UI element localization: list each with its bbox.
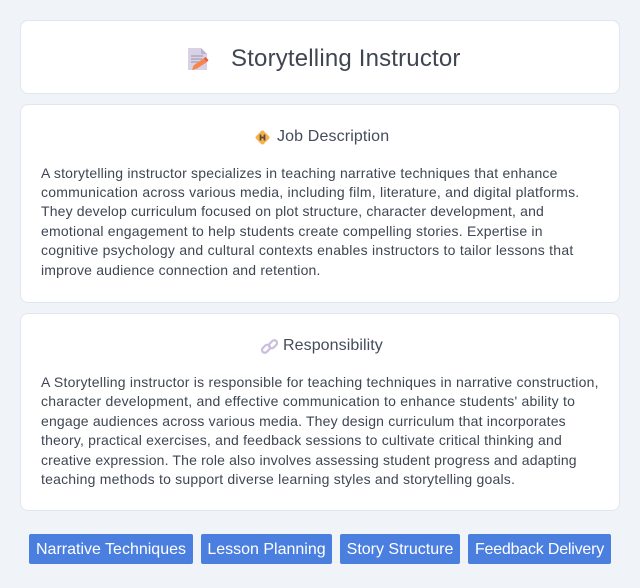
text block: responsibility: A Storytelling instructor is responsible for teaching techniques in narrative construction,: [41, 374, 599, 390]
text block: job description: [41, 165, 579, 278]
text block: job description: improve audience connection and retention.: [41, 262, 321, 278]
text block: responsibility: character development, and effective communication to enhance students' ability to: [41, 393, 575, 409]
text block: job description: cognitive psychology and cultural contexts enables instructors to tailor lessons that: [41, 242, 574, 258]
icon: chain link: [261, 339, 278, 354]
text block: job description: communication across various media, including film, literature, and digital platforms.: [41, 184, 579, 200]
panel: title card: [20, 20, 620, 94]
tag: Narrative Techniques: [29, 534, 193, 564]
tag: Lesson Planning: Lesson Planning: [207, 541, 326, 558]
text block: responsibility: engage audiences across various media. They design curriculum that incorporates: [41, 413, 566, 429]
icon: orange diamond: [256, 130, 270, 145]
text block: job description: They develop curriculum focused on plot structure, character development, and: [41, 203, 544, 219]
text block: job description: A storytelling instructor specializes in teaching narrative techniques that enhance: [41, 165, 558, 181]
tag: Story Structure: [340, 534, 460, 564]
heading: responsibility: Responsibility: [283, 337, 383, 354]
text block: responsibility: creative expression. The role also involves assessing student progress and adapting: [41, 452, 577, 468]
text block: responsibility: teaching methods to support diverse learning styles and storytelling goals.: [41, 471, 515, 487]
tag: Lesson Planning: [201, 534, 332, 564]
text block: job description: emotional engagement to help students create compelling stories. Expertise in: [41, 223, 543, 239]
icon: document with pencil: [188, 48, 208, 70]
text block: responsibility: [41, 374, 599, 487]
tag: Narrative Techniques: Narrative Techniques: [36, 541, 186, 558]
tag: Feedback Delivery: [468, 534, 611, 564]
tag: Story Structure: Story Structure: [347, 541, 453, 558]
panel: job description: [20, 104, 620, 303]
title: Storytelling Instructor: [231, 45, 461, 72]
panel: responsibility: [20, 313, 620, 511]
heading: job description: Job Description: [277, 128, 389, 145]
tag: Feedback Delivery: Feedback Delivery: [475, 541, 604, 558]
text block: responsibility: theory, practical exercises, and feedback sessions to cultivate critical thinking and: [41, 432, 562, 448]
